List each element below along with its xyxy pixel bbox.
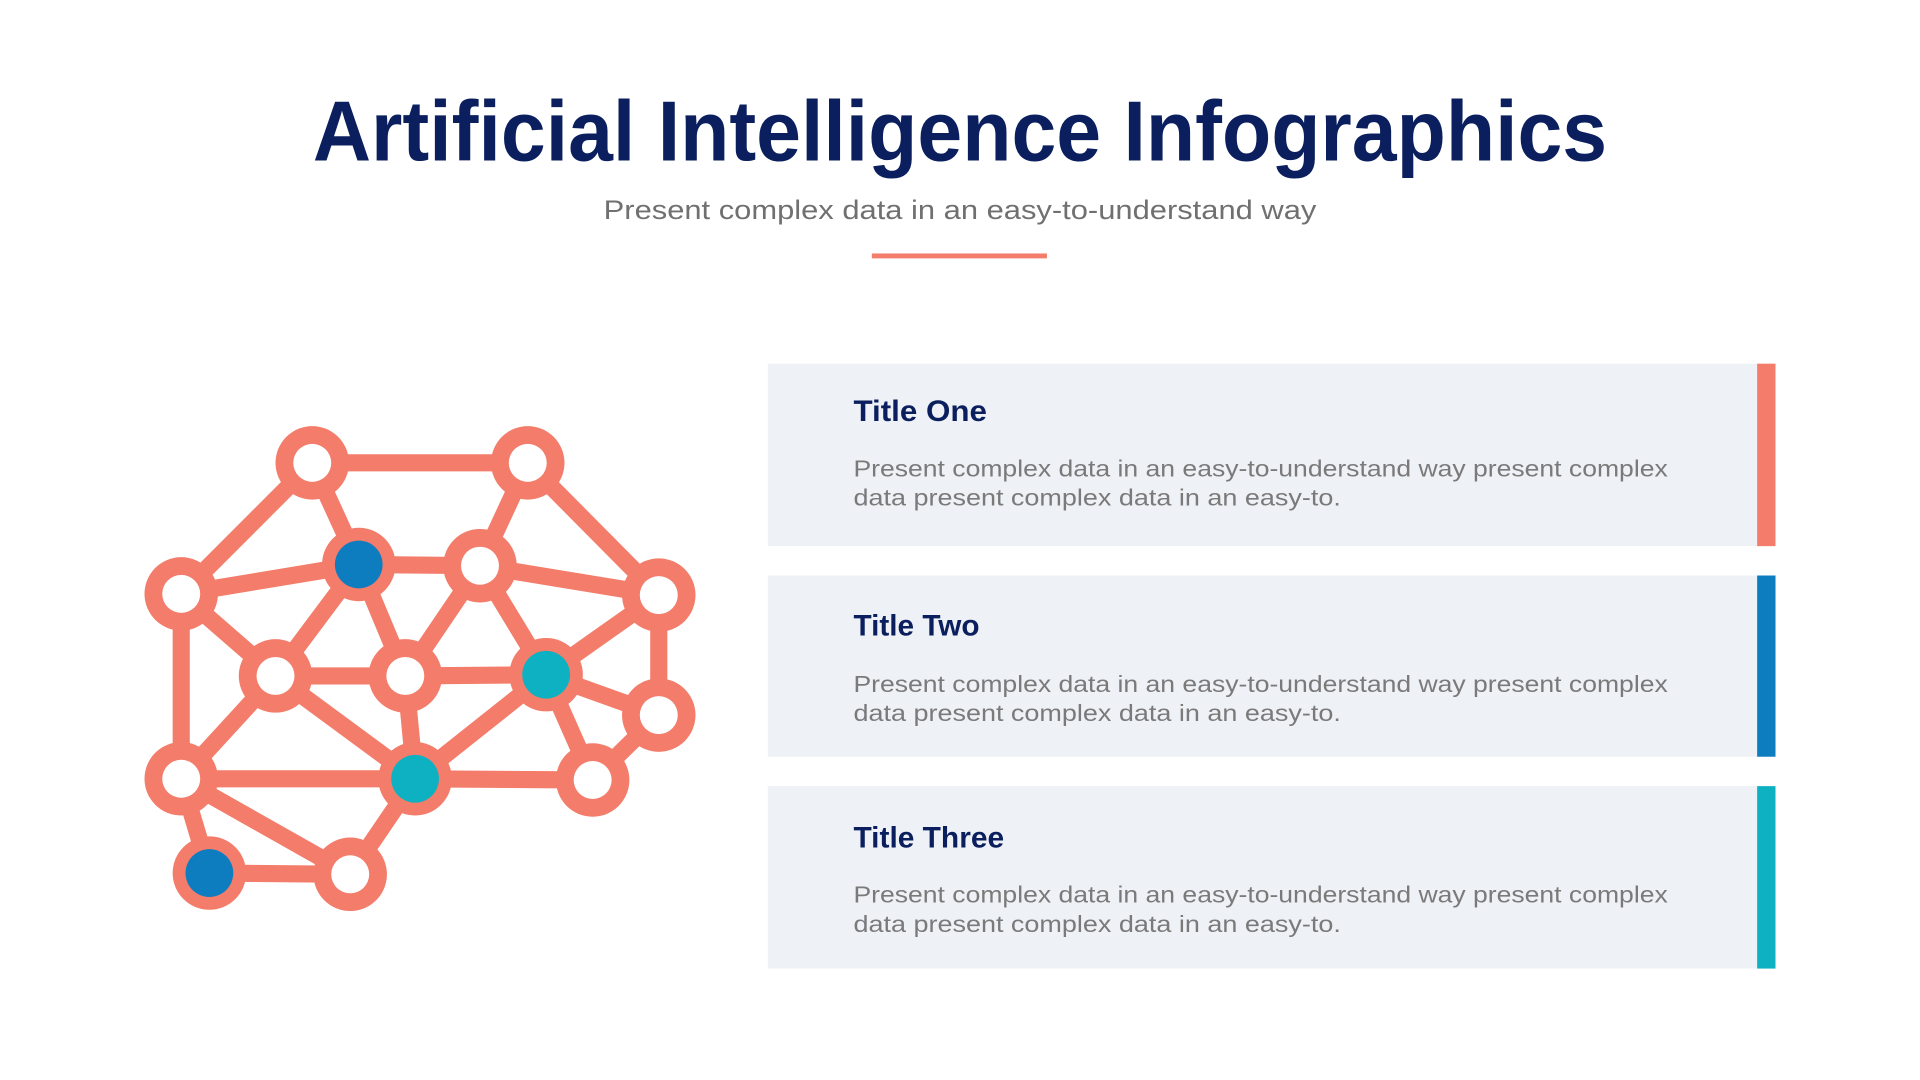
- panel: title one: data present complex data in an easy-to.: [853, 485, 1341, 511]
- title underline: [872, 253, 1047, 258]
- panel: title one: Present complex data in an easy-to-understand way present complex: [853, 455, 1668, 481]
- panel: title two: [768, 576, 1776, 757]
- panel: title three: Title Three: [853, 821, 1004, 854]
- network icon: [144, 426, 696, 911]
- panel: title three: data present complex data in an easy-to.: [853, 911, 1341, 937]
- panel: title one: Title One: [853, 395, 987, 428]
- panel: title two: data present complex data in an easy-to.: [853, 700, 1341, 726]
- subtitle: Present complex data in an easy-to-understand way: [604, 195, 1317, 225]
- panel: title two: Title Two: [853, 610, 980, 643]
- title: Artificial Intelligence Infographics: [313, 83, 1607, 179]
- panel: title one: [768, 364, 1776, 546]
- panel: title two: Present complex data in an easy-to-understand way present complex: [853, 671, 1668, 697]
- panel: title three: [768, 786, 1776, 969]
- panel: title three: Present complex data in an easy-to-understand way present complex: [853, 881, 1668, 907]
